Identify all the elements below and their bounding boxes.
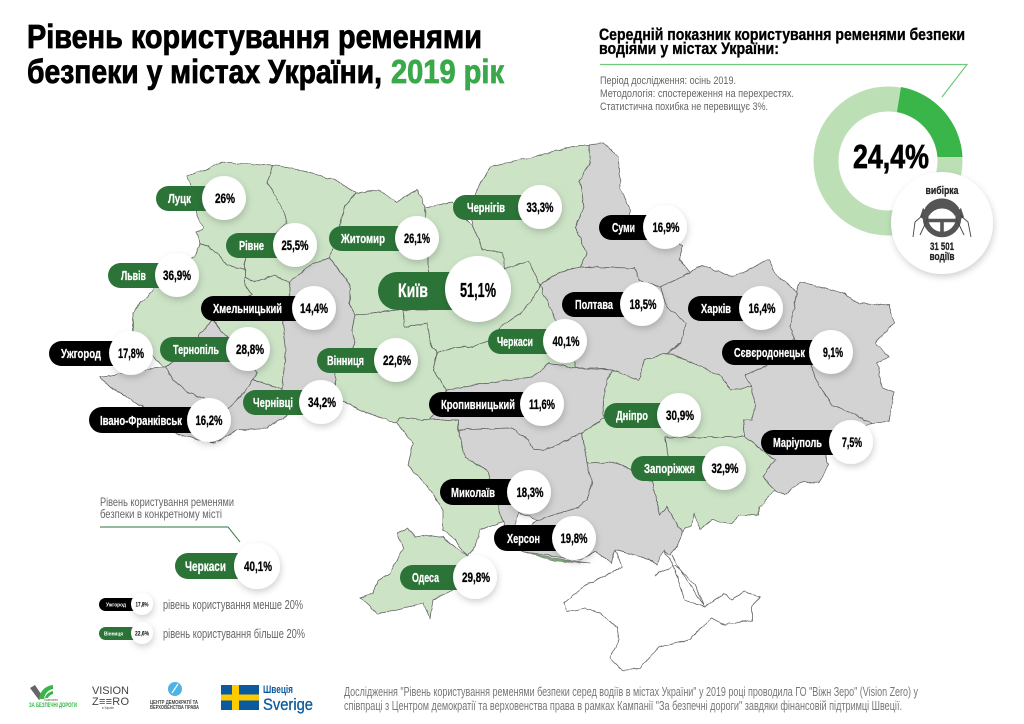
label: Житомир: Житомир (340, 231, 385, 246)
label: Чернігів: 33,3% (526, 200, 554, 215)
logo: Центр демократії та верховенства права: ЦЕНТР ДЕМОКРАТІЇ ТА (150, 699, 198, 706)
label: Дніпро: 30,9% (666, 408, 694, 423)
donut chart (826, 87, 962, 223)
legend: above 20%: рівень користування більше 20% (163, 626, 305, 641)
legend: below 20% (99, 593, 303, 615)
label: Кропивницький: 11,6% (529, 397, 555, 412)
label: Хмельницький (201, 286, 336, 330)
title: безпеки у містах України, (27, 53, 382, 90)
label: Рівне (226, 223, 317, 267)
label: Львів: Львів (121, 268, 146, 283)
legend: below 20%: 17,8% (136, 602, 149, 608)
label: Київ (378, 256, 511, 322)
legend sample: Черкаси: Черкаси (185, 558, 226, 574)
legend sample: Черкаси: 40,1% (244, 558, 272, 574)
logo: Центр демократії та верховенства права: ВЕРХОВЕНСТВА ПРАВА (150, 705, 199, 711)
label: Тернопіль: 28,8% (236, 342, 264, 357)
label: Тернопіль: Тернопіль (173, 342, 219, 357)
label: Вінниця: Вінниця (327, 353, 364, 368)
label: Чернігів: Чернігів (467, 200, 505, 215)
label: Ужгород: 17,8% (118, 346, 144, 361)
label: Хмельницький: 14,4% (300, 301, 328, 316)
label: Київ: Київ (398, 281, 428, 302)
label: Луцк: Луцк (168, 191, 191, 206)
legend sample: Черкаси (175, 543, 280, 589)
label: Житомир (329, 216, 439, 260)
label: Хмельницький: Хмельницький (213, 301, 282, 316)
label: Сєвєродонецьк (722, 330, 853, 374)
logo: Sweden flag and name: Sverige (263, 695, 313, 714)
logo: Центр демократії та верховенства права (150, 682, 199, 711)
label: Запоріжжя: 32,9% (712, 461, 738, 476)
label: Харків: 16,4% (748, 301, 776, 316)
logo: За безпечні дороги (29, 685, 77, 709)
label: Івано-Франківськ (89, 398, 231, 442)
label: Сєвєродонецьк: 9,1% (823, 345, 843, 360)
logo: Vision Zero: в Україні (102, 706, 114, 710)
icon: steering wheel (913, 199, 971, 237)
legend: below 20%: рівень користування менше 20% (163, 597, 303, 612)
label: Дніпро (604, 393, 701, 437)
label: Сєвєродонецьк: Сєвєродонецьк (734, 345, 805, 360)
methodology text: Методологія: спостереження на перехрестях. (600, 88, 794, 100)
label: Миколаїв (440, 470, 551, 514)
label: Запоріжжя (631, 446, 746, 490)
label: Миколаїв: Миколаїв (451, 485, 495, 500)
legend: above 20%: 22,6% (135, 632, 150, 638)
label: Рівне: Рівне (239, 238, 264, 253)
label: Одеса (400, 555, 497, 599)
label: Черкаси (488, 319, 587, 363)
label: Івано-Франківськ: Івано-Франківськ (100, 413, 182, 428)
logo: Vision Zero: Z≡≡RO (92, 696, 129, 708)
label: Рівне: 25,5% (282, 238, 308, 253)
label: Черкаси: Черкаси (497, 334, 533, 349)
label: Львів: 36,9% (163, 268, 191, 283)
label: Івано-Франківськ: 16,2% (196, 413, 222, 428)
donut chart: 24,4% (853, 138, 929, 175)
title: 2019 рік (391, 53, 504, 90)
label: Чернігів (453, 185, 562, 229)
label: Чернівці (243, 380, 343, 424)
label: Луцк: 26% (215, 191, 235, 206)
sample circle: водіїв (930, 251, 955, 263)
label: Харків (688, 286, 783, 330)
label: Чернівці: 34,2% (308, 395, 336, 410)
logo: За безпечні дороги: ЗА БЕЗПЕЧНІ ДОРОГИ (29, 703, 77, 709)
label: Кропивницький (429, 382, 564, 426)
label: Маріуполь (761, 420, 873, 464)
label: Одеса: Одеса (412, 570, 440, 585)
label: Суми: 16,9% (652, 220, 680, 235)
methodology text (600, 75, 794, 113)
sample circle: вибірка (926, 185, 959, 197)
callout line (600, 64, 967, 97)
footer text (344, 685, 919, 713)
label: Суми (599, 205, 687, 249)
label: Ужгород: Ужгород (61, 346, 102, 361)
logo: Vision Zero: VISION (92, 685, 129, 697)
logo: За безпечні дороги: Кампанія (44, 698, 58, 702)
label: Кропивницький: Кропивницький (441, 397, 515, 412)
label: Суми: Суми (612, 220, 635, 235)
sample circle (891, 172, 993, 274)
title: Рівень користування ременями (27, 18, 482, 55)
label: Миколаїв: 18,3% (516, 485, 544, 500)
label: Вінниця (317, 338, 418, 382)
label: Чернівці: Чернівці (253, 395, 293, 410)
sample circle: 31 501 (930, 241, 954, 253)
label: Київ: 51,1% (460, 280, 496, 302)
legend caption (100, 495, 234, 521)
label: Запоріжжя: Запоріжжя (644, 461, 695, 476)
methodology text: Період дослідження: осінь 2019. (600, 75, 736, 87)
logo: Sweden flag and name (221, 684, 313, 714)
label: Луцк (156, 176, 246, 220)
legend caption: Рівень користування ременями (100, 495, 234, 509)
title (27, 18, 504, 90)
label: Полтава: 18,5% (630, 297, 656, 312)
label: Полтава (562, 282, 664, 326)
map of Ukraine (100, 143, 894, 670)
logo: Vision Zero (92, 685, 129, 710)
average heading (599, 25, 965, 58)
label: Житомир: 26,1% (404, 231, 430, 246)
label: Тернопіль (160, 327, 270, 371)
legend line (100, 527, 240, 542)
label: Ужгород (49, 331, 153, 375)
label: Дніпро: Дніпро (616, 408, 648, 423)
label: Маріуполь: 7,5% (842, 435, 862, 450)
legend: above 20%: Вінниця (104, 632, 123, 638)
label: Херсон: 19,8% (560, 531, 588, 546)
label: Херсон: Херсон (507, 531, 540, 546)
label: Харків: Харків (701, 301, 731, 316)
methodology text: Статистична похибка не перевищує 3%. (600, 101, 768, 113)
legend: below 20%: Ужгород (106, 602, 127, 608)
average heading: водіями у містах України: (599, 39, 779, 58)
legend: above 20% (99, 622, 305, 644)
label: Полтава: Полтава (575, 297, 614, 312)
label: Херсон (494, 516, 596, 560)
label: Одеса: 29,8% (462, 570, 490, 585)
legend caption: безпеки в конкретному місті (100, 507, 222, 521)
label: Вінниця: 22,6% (383, 353, 411, 368)
label: Львів (108, 253, 199, 297)
logo: Sweden flag and name: Швеція (263, 684, 293, 696)
label: Маріуполь: Маріуполь (773, 435, 822, 450)
label: Черкаси: 40,1% (552, 334, 580, 349)
